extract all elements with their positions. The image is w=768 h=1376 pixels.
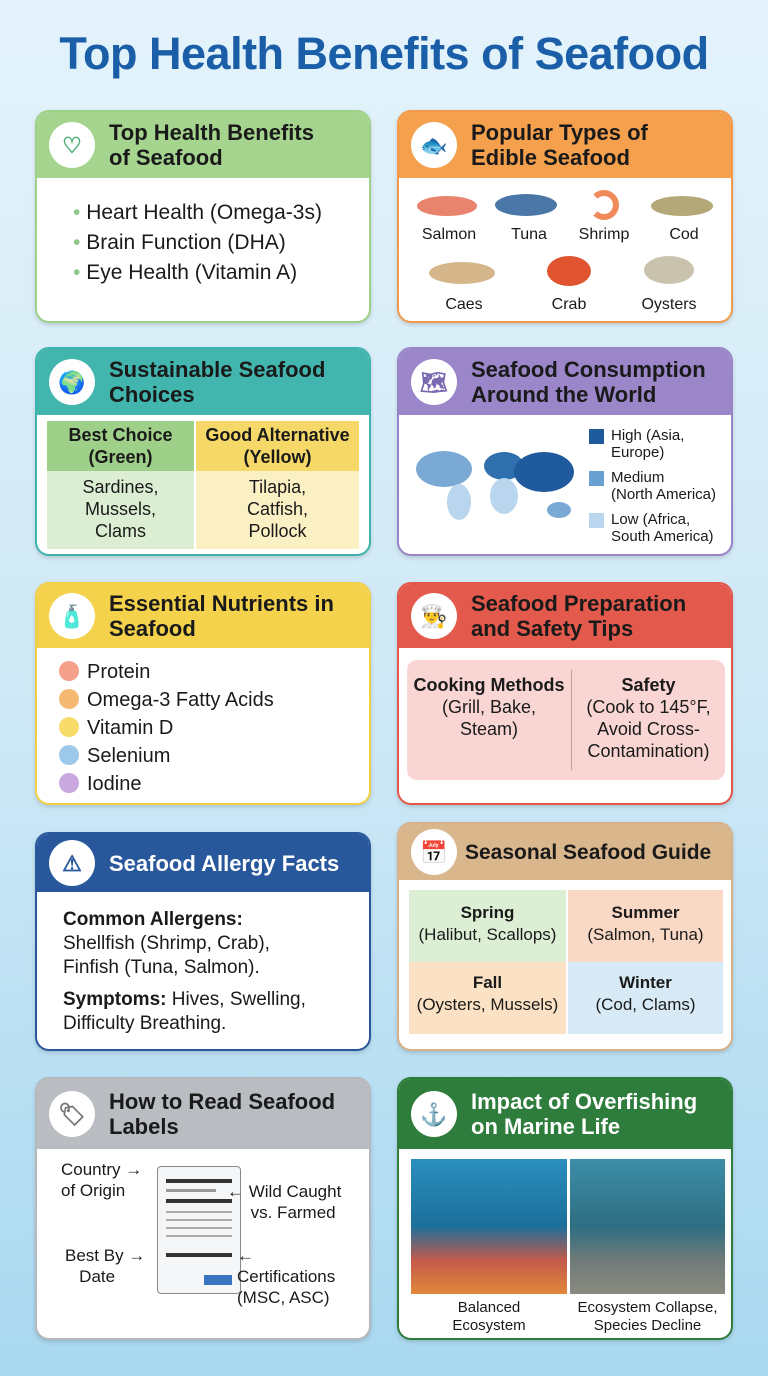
header: Seasonal Seafood Guide <box>465 840 711 864</box>
panel: preparation <box>397 582 733 805</box>
legend: Europe) <box>611 444 664 461</box>
allergy text <box>63 909 306 1034</box>
legend <box>589 427 716 545</box>
tips box: Safety <box>621 675 676 695</box>
header: Seafood Consumption <box>471 357 706 382</box>
header <box>399 112 731 178</box>
season grid <box>409 890 723 1034</box>
panel: allergy <box>35 832 371 1051</box>
label diagram: Best By → <box>65 1246 145 1265</box>
panel: seasonal <box>397 822 733 1051</box>
tips box: Avoid Cross- <box>597 719 700 739</box>
healthy reef image <box>411 1159 567 1294</box>
label diagram: of Origin <box>61 1181 125 1200</box>
tips box: Steam) <box>460 719 518 739</box>
header <box>37 349 369 415</box>
header: How to Read Seafood <box>109 1089 335 1114</box>
header: Essential Nutrients in <box>109 591 334 616</box>
map <box>416 451 574 520</box>
header: 📅 <box>420 840 448 864</box>
header: ⚠ <box>62 850 82 876</box>
season grid: Fall <box>473 973 502 992</box>
header: of Seafood <box>109 145 223 170</box>
seafood grid: Salmon <box>422 226 476 243</box>
nutrient list: Vitamin D <box>87 717 173 739</box>
label diagram: Certifications <box>237 1267 335 1286</box>
header <box>37 834 369 892</box>
season grid: Spring <box>461 903 514 922</box>
header <box>37 112 369 178</box>
allergy text: Common Allergens: <box>63 909 243 930</box>
allergy text: Shellfish (Shrimp, Crab), <box>63 933 270 954</box>
list: • Heart Health (Omega-3s) <box>73 201 322 224</box>
table: Mussels, <box>85 499 156 519</box>
table: Tilapia, <box>249 477 306 497</box>
header: Seafood <box>109 616 196 641</box>
panel: overfishing: Ecosystem Collapse, <box>577 1299 718 1316</box>
header: 🌍 <box>58 370 86 394</box>
label diagram: ← <box>237 1246 254 1265</box>
header: Popular Types of <box>471 120 648 145</box>
table: (Green) <box>88 447 152 467</box>
header: 🗺 <box>420 370 448 394</box>
season grid: Winter <box>619 973 672 992</box>
header: Sustainable Seafood <box>109 357 325 382</box>
seafood grid: Caes <box>445 296 483 313</box>
seafood grid: Cod <box>669 226 699 243</box>
header: ⚓ <box>420 1102 448 1126</box>
header: Impact of Overfishing <box>471 1089 697 1114</box>
panel: labels <box>35 1077 371 1340</box>
allergy text: Finfish (Tuna, Salmon). Symptoms: Hives, Swelling, <box>63 957 306 1010</box>
label diagram <box>61 1160 342 1307</box>
table: Catfish, <box>247 499 308 519</box>
header <box>37 584 369 648</box>
nutrient list: Omega-3 Fatty Acids <box>87 689 274 711</box>
label diagram: (MSC, ASC) <box>237 1288 330 1307</box>
label diagram: vs. Farmed <box>251 1203 336 1222</box>
season grid: (Halibut, Scallops) <box>419 925 556 944</box>
season grid: (Salmon, Tuna) <box>587 925 704 944</box>
list <box>73 201 322 284</box>
header <box>399 349 731 415</box>
panel: nutrients <box>35 582 371 805</box>
header <box>399 824 731 880</box>
season grid: (Cod, Clams) <box>595 995 696 1014</box>
legend: South America) <box>611 528 714 545</box>
panel: overfishing: Species Decline <box>594 1317 701 1334</box>
header: and Safety Tips <box>471 616 633 641</box>
table: Pollock <box>248 521 307 541</box>
season grid: Summer <box>611 903 680 922</box>
label diagram: Date <box>79 1267 115 1286</box>
header: Choices <box>109 382 195 407</box>
header: ♡ <box>62 132 82 158</box>
panel: consumption <box>397 347 733 556</box>
seafood grid: Tuna <box>511 226 547 243</box>
nutrient list: Iodine <box>87 773 142 795</box>
captions: Balanced <box>458 1299 520 1316</box>
table <box>47 421 359 549</box>
legend: High (Asia, <box>611 427 684 444</box>
tips box: Cooking Methods <box>414 675 564 695</box>
header: Seafood Preparation <box>471 591 686 616</box>
nutrient list: Protein <box>87 661 150 683</box>
header <box>399 1079 731 1149</box>
header <box>37 1079 369 1149</box>
header: 👨‍🍳 <box>420 604 448 628</box>
header: 🧴 <box>58 604 86 628</box>
seafood grid: Oysters <box>641 296 697 313</box>
tips box: Contamination) <box>587 741 710 761</box>
nutrient list <box>59 661 274 795</box>
nutrient list: Selenium <box>87 745 170 767</box>
list: • Brain Function (DHA) <box>73 231 286 254</box>
season grid: (Oysters, Mussels) <box>417 995 558 1014</box>
table: Sardines, <box>82 477 159 497</box>
collapsed reef image <box>570 1159 725 1294</box>
table: (Yellow) <box>243 447 312 467</box>
table: Clams <box>95 521 146 541</box>
legend: Medium <box>611 469 664 486</box>
list: • Eye Health (Vitamin A) <box>73 261 297 284</box>
seafood grid: Shrimp <box>579 226 629 243</box>
tips box: (Cook to 145°F, <box>586 697 711 717</box>
tips box <box>407 660 725 780</box>
header: Edible Seafood <box>471 145 630 170</box>
captions: Ecosystem <box>452 1317 526 1334</box>
header: Around the World <box>471 382 656 407</box>
tips box: (Grill, Bake, <box>442 697 536 717</box>
legend: Low (Africa, <box>611 511 690 528</box>
header: Top Health Benefits <box>109 120 314 145</box>
header: on Marine Life <box>471 1114 620 1139</box>
table: Good Alternative <box>205 425 350 445</box>
header: Seafood Allergy Facts <box>109 850 339 876</box>
captions <box>452 1299 526 1334</box>
seafood grid: Crab <box>552 296 586 313</box>
panel: sustainable <box>35 347 371 556</box>
title: Top Health Benefits of Seafood <box>59 28 709 79</box>
panel: popular types <box>397 110 733 323</box>
label diagram: ← Wild Caught <box>227 1182 341 1201</box>
header: 🏷 <box>58 1102 86 1126</box>
allergy text: Difficulty Breathing. <box>63 1013 226 1034</box>
legend: (North America) <box>611 486 716 503</box>
table: Best Choice <box>68 425 173 445</box>
panel: health benefits <box>35 110 371 323</box>
header: 🐟 <box>420 132 448 158</box>
header <box>399 584 731 648</box>
seafood grid <box>417 190 713 313</box>
label diagram: Country → <box>61 1160 142 1179</box>
panel: overfishing <box>397 1077 733 1340</box>
header: Labels <box>109 1114 179 1139</box>
